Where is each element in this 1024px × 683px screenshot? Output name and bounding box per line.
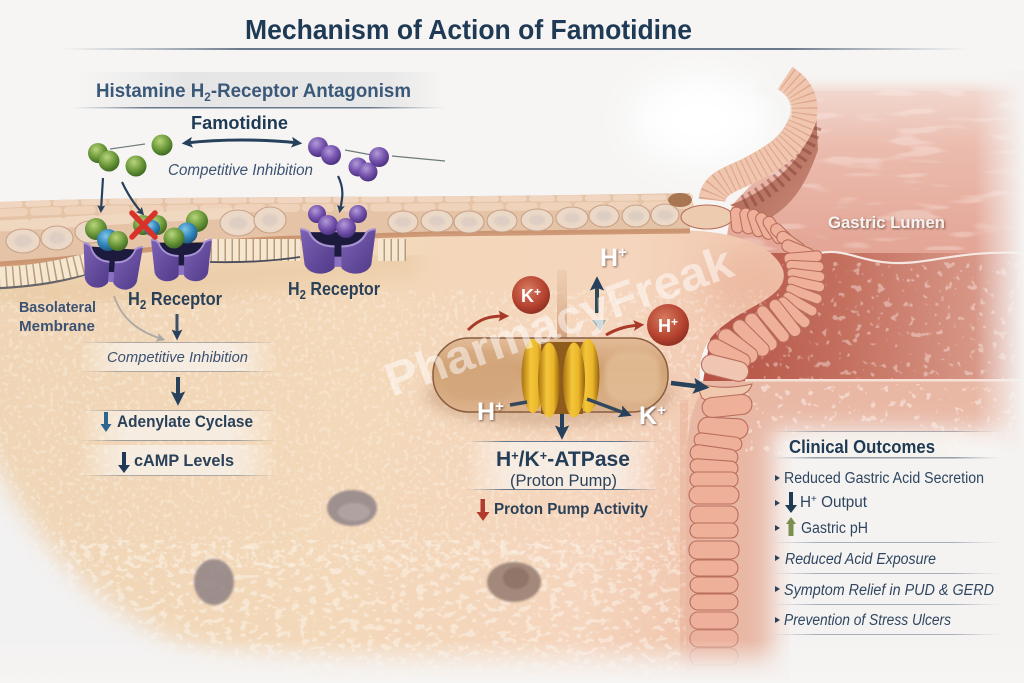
icon: red cross — [132, 213, 155, 237]
label: H+ top: H — [600, 244, 618, 272]
step: adenylate cyclase — [78, 410, 278, 441]
icon: blocked H2 receptor left — [81, 218, 143, 291]
panel: clinical outcomes backdrop — [772, 430, 1024, 683]
arrow: potassium curved — [468, 316, 505, 330]
arrow: hydrogen curved — [606, 325, 640, 335]
label: basolateral membrane: Basolateral — [19, 300, 96, 316]
item: gastric pH: Gastric pH — [801, 520, 868, 537]
heading: histamine H2-receptor antagonism: -Receptor Antagonism — [211, 81, 411, 102]
icon: H+ circle: H — [658, 316, 671, 336]
panel: H+/K+-ATPase label: -ATPase — [547, 447, 630, 471]
panel: H+/K+-ATPase label: (Proton Pump) — [510, 472, 617, 490]
icon: K+ circle: + — [534, 285, 541, 299]
label: H2 receptor right: Receptor — [306, 278, 380, 299]
watermark: PharmacyFreak — [378, 234, 740, 406]
icon: H+ circle — [647, 304, 689, 346]
panel: H+/K+-ATPase label: H — [496, 447, 512, 471]
nucleus: lower left — [194, 559, 234, 605]
title: Mechanism of Action of Famotidine — [245, 14, 692, 45]
arrow: receptor to cascade — [176, 314, 178, 336]
label: H2 receptor left: 2 — [140, 297, 146, 312]
label: basolateral membrane: Membrane — [19, 319, 95, 335]
label: H+ top: + — [618, 244, 627, 261]
step: cAMP levels — [78, 445, 278, 476]
arrow: pump to K+ — [587, 399, 627, 414]
panel: villi along the lumen border — [681, 205, 826, 665]
heading: histamine H2-receptor antagonism: 2 — [204, 90, 211, 104]
label: H+ left: + — [495, 398, 504, 415]
heading: histamine H2-receptor antagonism: Histamine H — [96, 81, 206, 102]
label: H+ left: H — [477, 398, 495, 426]
item: prevention of stress ulcers: Prevention of Stress Ulcers — [784, 612, 951, 629]
panel: H+/K+-ATPase label: + — [540, 448, 548, 463]
label: K+ right: K — [639, 402, 657, 430]
panel: H+/K+-ATPase label: /K — [519, 447, 540, 471]
panel: clinical outcomes — [770, 431, 1005, 635]
label: famotidine: Famotidine — [191, 112, 288, 133]
arrow: cascade one — [176, 377, 180, 400]
icon: free famotidine molecules — [88, 134, 172, 176]
item: H+ output: Output — [817, 494, 868, 511]
label: reduced proton pump activity — [476, 499, 648, 521]
label: H2 receptor right: H — [288, 278, 301, 299]
arrow: gray pathway arrow — [114, 296, 162, 339]
step: cAMP levels: cAMP Levels — [134, 452, 234, 470]
item: reduced acid exposure: Reduced Acid Exposure — [785, 551, 936, 568]
heading: clinical outcomes: Clinical Outcomes — [789, 437, 935, 457]
nucleus: upper — [327, 490, 377, 526]
label: H2 receptor left: Receptor — [146, 288, 222, 309]
panel: basolateral cell layer — [0, 193, 692, 264]
heading: histamine H2-receptor antagonism — [70, 72, 445, 108]
label: competitive inhibition: Competitive Inhibition — [168, 162, 313, 179]
label: gastric lumen: Gastric Lumen — [828, 214, 945, 232]
arrow: pump downward — [560, 414, 564, 434]
icon: K+ circle: K — [521, 286, 534, 306]
label: H2 receptor left: H — [128, 288, 141, 309]
label: H2 receptor right: 2 — [300, 287, 306, 302]
panel: pink submucosa — [680, 379, 1024, 683]
item: H+ output: + — [811, 494, 817, 505]
item: reduced gastric acid secretion: Reduced Gastric Acid Secretion — [784, 470, 984, 487]
item: H+ output: H — [800, 494, 811, 511]
panel: parietal cell cytoplasm — [0, 230, 790, 683]
step: competitive inhibition — [78, 342, 278, 372]
arrow: H+ vertical exchange — [592, 282, 606, 331]
item: symptom relief: Symptom Relief in PUD & GERD — [784, 582, 994, 599]
panel: H+/K+-ATPase label: + — [511, 448, 519, 463]
panel: H+/K+-ATPase label — [465, 441, 660, 490]
arrow: H+ into pump — [510, 402, 527, 405]
icon: K+ circle — [512, 276, 550, 314]
step: competitive inhibition: Competitive Inhibition — [107, 350, 248, 366]
label: basolateral membrane — [19, 300, 96, 335]
icon: H+ circle: + — [671, 315, 678, 329]
icon: free histamine molecules — [308, 137, 445, 182]
nucleus: lower centre — [487, 562, 541, 602]
item: H+ output — [775, 492, 868, 513]
icon: proton pump — [425, 270, 675, 427]
panel: palisade membrane — [0, 250, 406, 288]
panel: upper gastric wall fold — [712, 78, 818, 218]
item: gastric pH — [775, 517, 868, 537]
arrow: competition double arrow — [186, 140, 298, 143]
right edge fade — [975, 70, 1024, 470]
label: reduced proton pump activity: Proton Pump Activity — [494, 501, 648, 518]
label: K+ right: + — [657, 402, 666, 419]
bottom and corner fades — [0, 400, 1024, 683]
icon: H2 receptor with histamine — [300, 205, 376, 274]
step: adenylate cyclase: Adenylate Cyclase — [117, 413, 253, 431]
panel: gastric lumen tissue — [700, 62, 1024, 383]
panel: signaling cascade — [78, 342, 278, 476]
icon: blocked H2 receptor middle — [133, 210, 212, 281]
arrow: pump to lumen — [671, 383, 703, 387]
arrows: molecules to receptors — [101, 176, 342, 213]
